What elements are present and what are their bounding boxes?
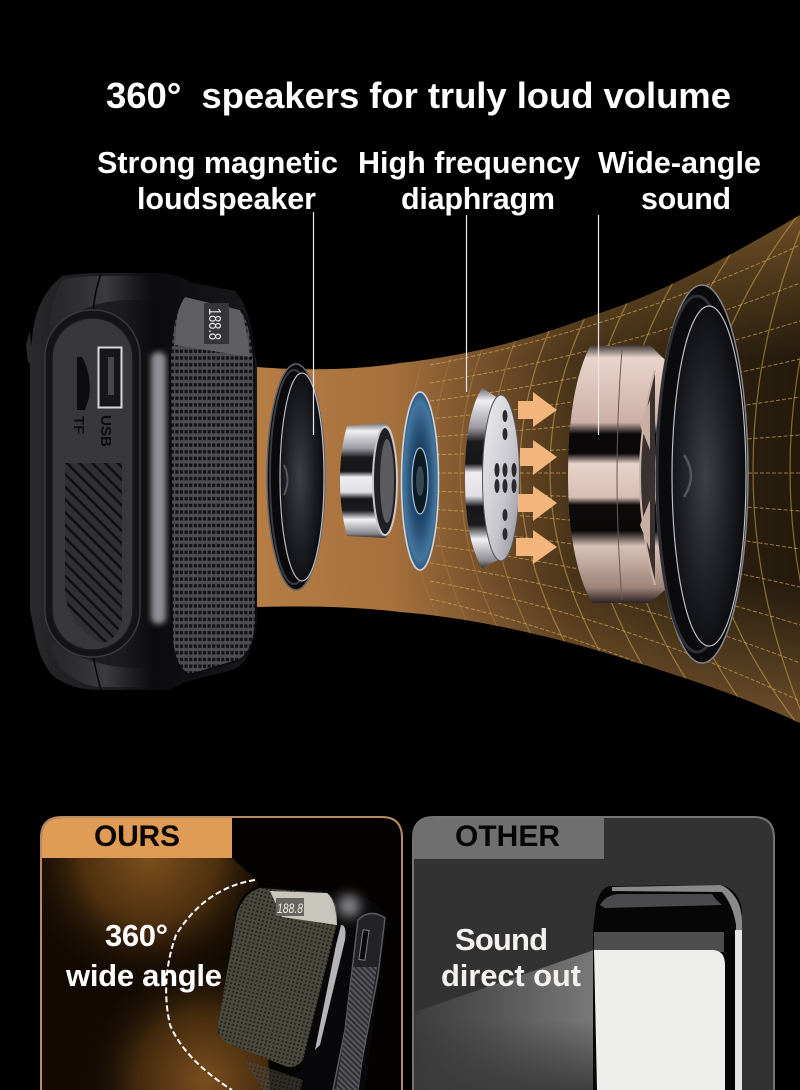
large speaker [656,285,748,663]
label: wide-angle sound: Wide-angle [598,146,761,180]
tab [413,818,604,859]
front grille [170,297,256,675]
main speaker device [26,273,257,690]
display: 188.8 [205,308,225,340]
arrow 4 [516,530,557,564]
label: strong magnetic loudspeaker: Strong magnetic [97,146,338,180]
label: high frequency diaphragm [358,146,580,216]
360 wide angle text [65,918,222,993]
sound direct out text: direct out [441,958,581,993]
bottom shoulder gloss [50,640,162,687]
label: strong magnetic loudspeaker [97,146,338,216]
panel: ours [41,817,402,1090]
side highlight [151,352,166,624]
arrow 1 [518,392,557,427]
sound direct out text [441,922,581,993]
white panel [594,950,725,1090]
360 wide angle text: wide angle [65,958,222,993]
tf label: TF [70,416,87,434]
usb port [98,348,122,408]
sound beam with grid [257,200,800,740]
label: wide-angle sound: sound [641,182,731,216]
small speaker [218,886,385,1090]
label: wide-angle sound [598,146,761,216]
small display [276,898,304,916]
competitor device [593,885,742,1090]
bottom grille [245,1060,303,1090]
top shoulder gloss [50,276,162,335]
top plate [175,297,250,357]
speaker body [30,273,257,690]
leader line: strong magnetic [312,212,314,435]
striped grip [65,463,122,643]
sound beam [414,950,594,1090]
leader line: wide-angle [598,215,600,435]
large magnet [568,345,665,603]
arrow 2 [520,440,557,475]
tab label: OTHER [455,820,560,853]
tab label: OURS [94,820,180,853]
right rim highlight [315,925,346,1050]
blue diaphragm disc [402,392,438,570]
360 wide angle text: 360° [105,918,168,953]
arrow 3 [518,486,557,521]
arrows [516,392,557,564]
thin speaker part [267,364,325,590]
leader line: high frequency [466,215,468,392]
glow background [42,858,270,1090]
title: 360° speakers for truly loud volume [106,75,731,116]
tf slot [77,357,90,410]
metal voice coil disc [465,388,520,568]
usb label: USB [97,415,114,447]
label: high frequency diaphragm: diaphragm [401,182,555,216]
metal ring magnet [340,423,397,538]
label: strong magnetic loudspeaker: loudspeaker [137,182,316,216]
dashed arc [166,880,255,1090]
inner side panel [52,318,133,650]
panel: other [413,817,774,1090]
seam lines [93,274,101,690]
side knob [26,330,32,366]
sound direct out text: Sound [455,922,548,957]
side panel [45,310,140,657]
label: high frequency diaphragm: High frequency [358,146,580,180]
small display: 188.8 [277,900,303,916]
display [204,303,229,344]
tab [42,818,232,858]
